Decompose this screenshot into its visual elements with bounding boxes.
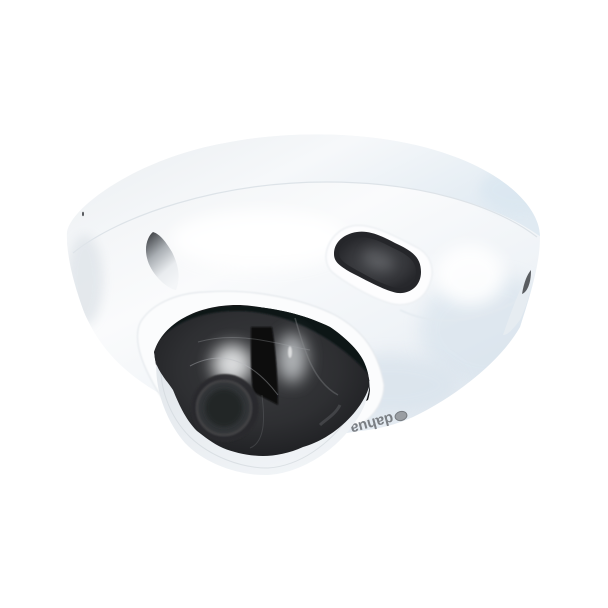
bright body highlight bbox=[170, 210, 350, 270]
body shading bbox=[421, 280, 532, 376]
black recess edge at top bbox=[162, 306, 368, 375]
dark recess bbox=[154, 305, 370, 420]
highlight: right bbox=[277, 333, 307, 383]
vent slot: right bbox=[503, 270, 531, 335]
black reflection band bbox=[251, 327, 278, 405]
glass reflection lines bbox=[190, 358, 278, 395]
lens collar bbox=[138, 291, 384, 440]
lens barrel bbox=[200, 373, 258, 416]
camera body bbox=[60, 134, 560, 440]
body crease bbox=[401, 310, 410, 314]
screw hole: left of top cover bbox=[82, 212, 84, 216]
brand logo on body: dahua bbox=[348, 410, 395, 438]
clear dome shell bbox=[156, 320, 370, 475]
dark interior bbox=[155, 306, 369, 456]
sensor housing halo bbox=[326, 225, 432, 305]
highlight: left bbox=[212, 344, 252, 384]
illustration: white dome security camera bbox=[67, 134, 540, 475]
PIR sensor window bbox=[334, 232, 421, 293]
dome lens bbox=[150, 300, 372, 475]
top cover bbox=[350, 147, 540, 236]
vent slot: left bbox=[146, 232, 179, 290]
